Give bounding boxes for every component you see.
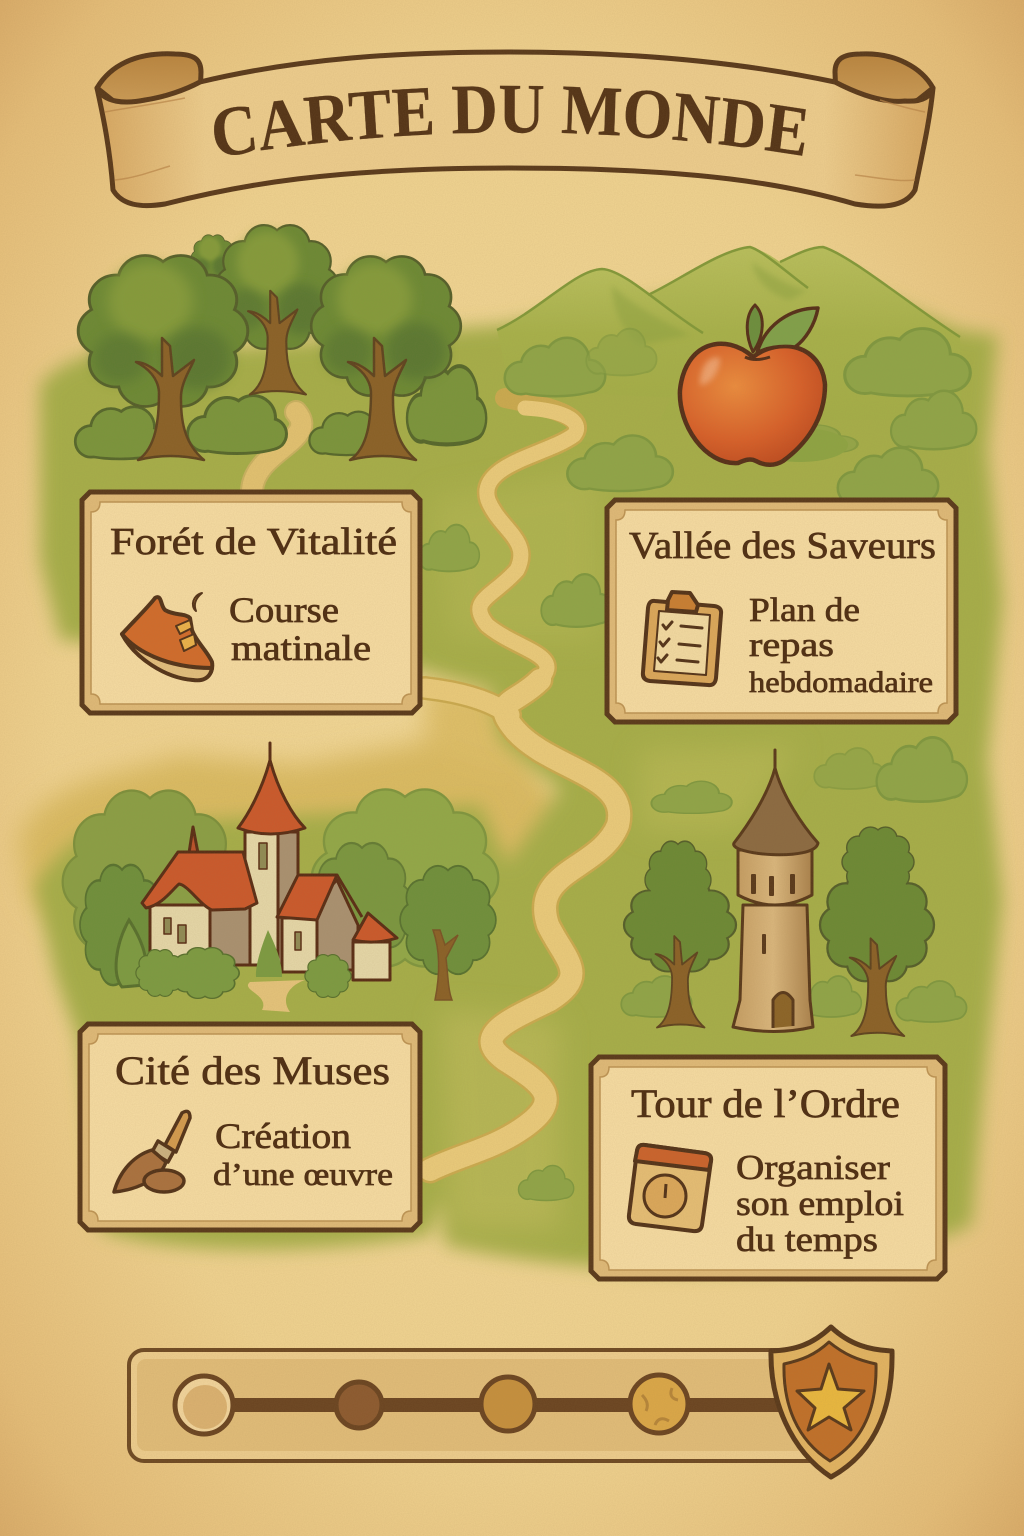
- icon: clipboard checklist: [643, 592, 721, 685]
- green washes: [35, 272, 1003, 1271]
- card: Forêt de Vitalité: [82, 492, 420, 713]
- path surface: [252, 408, 619, 1170]
- ribbon: [97, 52, 933, 206]
- fold lines: [105, 98, 925, 181]
- card: Vallée des Saveurs: [607, 500, 956, 722]
- card frame: [607, 500, 956, 722]
- stone tower: [733, 750, 818, 1032]
- heading: Vallée des Saveurs: [629, 525, 936, 567]
- card frame: [82, 492, 420, 713]
- icon: paintbrush: [114, 1111, 190, 1192]
- card: Vallée des Saveurs: hebdomadaire: [749, 666, 933, 699]
- hills: [497, 247, 962, 420]
- background bushes: [419, 329, 976, 1200]
- label: Course: [229, 590, 339, 630]
- tan washes: [18, 680, 565, 940]
- lighter yellow-green patches: [430, 470, 800, 1230]
- card: Cité des Muses: d’une œuvre: [213, 1156, 393, 1192]
- foreground bushes and village path: [248, 980, 305, 1012]
- path edge: [252, 398, 619, 1170]
- icon: calendar with clock: [629, 1145, 711, 1231]
- label: Plan de: [749, 592, 860, 629]
- heading: Tour de l’Ordre: [631, 1081, 900, 1126]
- bar frame: [129, 1350, 829, 1461]
- step 1: [175, 1376, 233, 1434]
- winding path: [252, 398, 619, 1170]
- card: Forêt de Vitalité: matinale: [231, 628, 371, 668]
- icon: shield with star: [771, 1327, 892, 1477]
- card: Tour de l’Ordre: [591, 1057, 945, 1279]
- church and houses: [142, 743, 397, 980]
- step 4: [630, 1375, 688, 1433]
- village illustration: [64, 743, 497, 1012]
- apple illustration: [680, 305, 848, 465]
- card: Tour de l’Ordre: du temps: [736, 1220, 878, 1259]
- card frame: [591, 1057, 945, 1279]
- progress line: [225, 1398, 795, 1412]
- small trunk: [433, 930, 458, 1000]
- card frame: [80, 1024, 420, 1230]
- label: Création: [215, 1116, 351, 1156]
- step 3: [481, 1377, 535, 1431]
- card: Vallée des Saveurs: repas: [749, 627, 834, 664]
- icon: running shoe: [122, 593, 212, 680]
- right tree: [821, 828, 933, 1036]
- tower illustration: [625, 750, 933, 1036]
- title text: CARTE DU MONDE: [214, 86, 806, 156]
- title banner: [94, 50, 936, 209]
- card: Cité des Muses: [80, 1024, 420, 1230]
- heading: Forét de Vitalité: [110, 521, 397, 563]
- step 2: [336, 1382, 382, 1428]
- left tree: [625, 842, 735, 1028]
- forest of trees: [76, 226, 486, 460]
- progress bar: [129, 1327, 892, 1477]
- card: Tour de l’Ordre: son emploi: [736, 1184, 904, 1223]
- land: terrain: [18, 272, 1003, 1271]
- heading: Cité des Muses: [115, 1048, 390, 1093]
- label: Organiser: [736, 1148, 890, 1187]
- background bushes: [64, 791, 497, 984]
